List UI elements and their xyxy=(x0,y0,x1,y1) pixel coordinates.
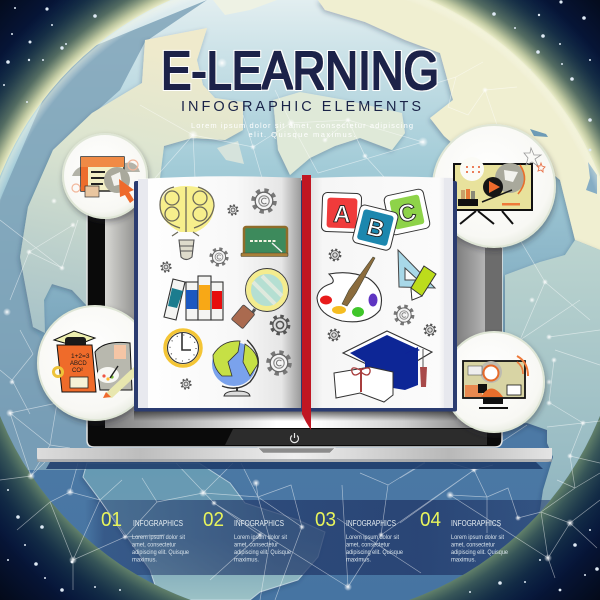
icon: paint palette xyxy=(317,257,382,322)
right page edge xyxy=(444,178,453,408)
number 04: 04 xyxy=(420,509,441,531)
left ocean shade xyxy=(0,0,207,470)
body 02 xyxy=(234,534,291,564)
book shadow on screen xyxy=(134,411,457,421)
intro text xyxy=(191,121,413,139)
heading 03: INFOGRAPHICS xyxy=(346,519,396,528)
intro text: Lorem ipsum dolor sit amet, consectetur adipiscing xyxy=(191,121,413,130)
icon: gears xyxy=(161,190,290,389)
body 04: adipiscing elit. Quisque xyxy=(451,549,508,556)
right page xyxy=(311,176,453,408)
book cover xyxy=(134,181,457,412)
laptop base shadow xyxy=(46,462,543,469)
icon: ABC blocks xyxy=(321,188,431,251)
number 02: 02 xyxy=(203,509,224,531)
icon: brain light bulb xyxy=(160,186,214,260)
land: south america xyxy=(83,463,325,600)
body 04: Lorem ipsum dolor sit xyxy=(451,534,504,541)
land: upper left continent xyxy=(20,28,243,333)
circle: top right xyxy=(433,125,555,247)
subtitle: INFOGRAPHIC ELEMENTS xyxy=(181,99,421,115)
right page illustrations xyxy=(317,188,436,402)
intro text: elit. Quisque maximus. xyxy=(248,130,356,139)
icon: books xyxy=(164,276,223,320)
body 02: adipiscing elit. Quisque xyxy=(234,549,291,556)
info block 03 xyxy=(315,509,403,564)
circle: bottom right xyxy=(444,332,544,432)
body 03: Lorem ipsum dolor sit xyxy=(346,534,399,541)
heading 04: INFOGRAPHICS xyxy=(451,519,501,528)
body 03: maximus. xyxy=(346,556,371,564)
icon: browser window xyxy=(72,157,140,203)
ribbon bookmark xyxy=(302,175,311,430)
body 02: amet, consectetur xyxy=(234,542,279,548)
sea crescent xyxy=(586,162,597,194)
cream upper halo xyxy=(0,0,600,176)
body 04: amet, consectetur xyxy=(451,542,496,548)
body 01: amet, consectetur xyxy=(132,542,177,548)
icon: open textbook: ABCD xyxy=(70,361,87,367)
body 03: adipiscing elit. Quisque xyxy=(346,549,403,556)
icon: diploma xyxy=(334,367,393,402)
information band xyxy=(85,500,560,575)
icon: presentation board xyxy=(454,148,545,224)
title: E-LEARNING xyxy=(161,41,439,101)
icon: online tutor monitor xyxy=(463,356,528,409)
land: north top xyxy=(213,0,277,15)
body 04 xyxy=(451,534,508,564)
laptop xyxy=(37,180,552,469)
icon: chalkboard xyxy=(241,227,288,256)
icon: play button xyxy=(483,177,503,197)
right bezel grey xyxy=(485,248,502,333)
heading 02: INFOGRAPHICS xyxy=(234,519,284,528)
laptop lid bezel xyxy=(87,180,502,447)
number 01: 01 xyxy=(101,509,122,531)
info block 02 xyxy=(203,509,291,564)
icon: graduation cap xyxy=(343,331,432,390)
heading 01: INFOGRAPHICS xyxy=(133,519,183,528)
icon: clock xyxy=(165,330,201,366)
icon: open textbook: CO² xyxy=(72,368,83,374)
land: right lower xyxy=(503,240,600,514)
body 01 xyxy=(132,534,189,564)
body 03: amet, consectetur xyxy=(346,542,391,548)
icon: paint brush xyxy=(342,257,375,306)
icon: right page gears xyxy=(329,250,435,340)
left page edge xyxy=(138,179,148,408)
left page xyxy=(138,176,301,408)
icon: magnifying glass xyxy=(231,268,288,329)
land: upper right continent xyxy=(318,0,600,250)
icon: stars xyxy=(524,148,541,166)
land: centre peninsula xyxy=(217,141,244,164)
icon: pencil xyxy=(104,366,141,398)
laptop base xyxy=(37,448,552,462)
icon: speech bubble xyxy=(460,157,484,181)
power icon xyxy=(290,433,298,443)
laptop screen silver reflection xyxy=(105,405,487,428)
body 01: maximus. xyxy=(132,556,157,564)
globe rim xyxy=(0,0,600,199)
circle: bottom left xyxy=(38,306,152,420)
circle: top left xyxy=(63,134,147,218)
body 01: adipiscing elit. Quisque xyxy=(132,549,189,556)
icon: open textbook: 1+2=3 xyxy=(71,353,90,360)
body 02: Lorem ipsum dolor sit xyxy=(234,534,287,541)
laptop notch xyxy=(258,448,335,453)
bezel reflection xyxy=(225,429,487,445)
land: north centre strip xyxy=(273,92,405,175)
open book xyxy=(134,175,457,430)
laptop screen xyxy=(105,180,487,428)
body 02: maximus. xyxy=(234,556,259,564)
icon: open textbook xyxy=(54,331,141,398)
icon: ABC blocks: A xyxy=(333,201,351,228)
info block 01 xyxy=(101,509,189,564)
icon: set square and pencil xyxy=(398,250,436,300)
icon: desk globe xyxy=(212,340,258,396)
body 04: maximus. xyxy=(451,556,476,564)
info block 04 xyxy=(420,509,508,564)
icon: cursor arrow xyxy=(119,179,134,203)
left page illustrations xyxy=(160,186,290,396)
number 03: 03 xyxy=(315,509,336,531)
sea lake xyxy=(530,129,548,137)
body 03 xyxy=(346,534,403,564)
body 01: Lorem ipsum dolor sit xyxy=(132,534,185,541)
icon: ABC blocks: B xyxy=(364,214,387,244)
icon: ABC blocks: C xyxy=(396,198,419,228)
